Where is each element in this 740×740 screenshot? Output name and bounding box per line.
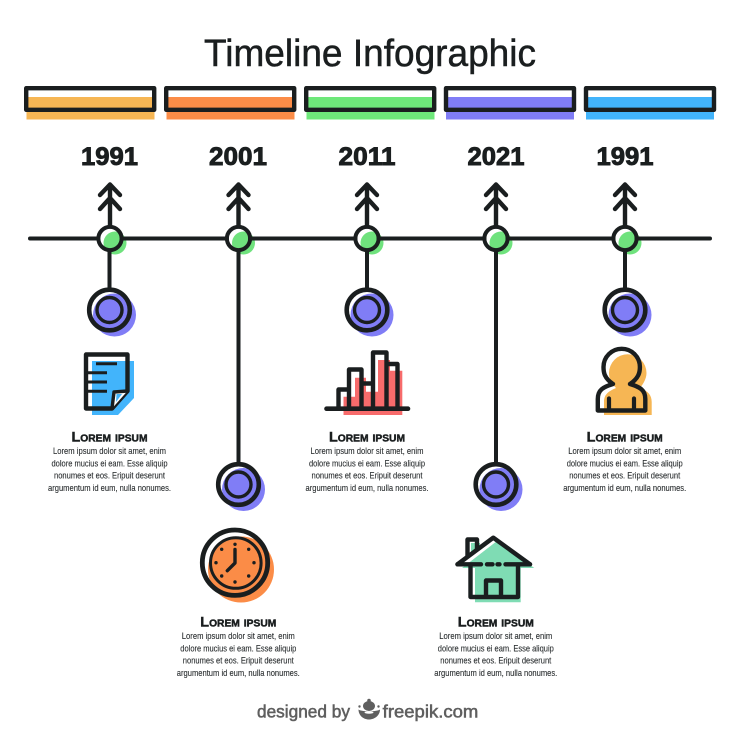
marker: column 3 [347,290,394,336]
arrow: 2001 [228,184,248,225]
heading: Lorem ipsum [458,614,534,630]
heading: Lorem ipsum [587,429,663,445]
timeline axis [30,236,710,240]
year 2011: 2011 [338,143,396,171]
arrow: 2011 [357,184,377,225]
credit text left: designed by [257,701,350,721]
connectors [110,251,625,462]
bar: blue [586,88,714,120]
body copy [563,446,686,493]
body copy: argumentum id eum, nulla nonumes. [177,668,300,678]
icon: clock [202,530,274,602]
arrow: 1991 [100,184,120,225]
body copy: nonumes et eos. Eripuit deserunt [569,471,681,481]
text block: column 1 [48,429,171,493]
year labels [81,143,654,171]
body copy: argumentum id eum, nulla nonumes. [48,483,171,493]
body copy: argumentum id eum, nulla nonumes. [563,483,686,493]
body copy [434,631,557,678]
timeline node rings [98,227,637,250]
body copy: nonumes et eos. Eripuit deserunt [440,656,552,666]
icon: house [458,538,534,602]
body copy [306,446,428,493]
body copy [48,446,171,493]
credit text right: freepik.com [383,701,478,721]
body copy: Lorem ipsum dolor sit amet, enim [53,446,166,456]
body copy: dolore mucius ei eam. Esse aliquip [180,643,296,653]
arrow: 2021 [486,184,506,225]
body copy: Lorem ipsum dolor sit amet, enim [310,446,424,456]
bar: purple [446,88,574,120]
text block: column 4 [434,614,557,678]
body copy: Lorem ipsum dolor sit amet, enim [439,631,552,641]
body copy: nonumes et eos. Eripuit deserunt [54,471,165,481]
body copy: dolore mucius ei eam. Esse aliquip [309,458,425,468]
heading: Lorem ipsum [329,429,405,445]
marker: column 2 [218,464,265,511]
body copy: nonumes et eos. Eripuit deserunt [183,656,294,666]
heading: Lorem ipsum [200,614,276,630]
arrow: 1991 second [615,184,635,225]
bar: yellow [26,88,155,120]
footer credit [257,699,478,721]
icon: document [86,354,134,415]
icon: bar chart [326,352,408,415]
heading: Lorem ipsum [72,429,148,445]
year 2021: 2021 [468,143,525,171]
timeline nodes shadows [104,232,642,254]
title: Timeline Infographic [204,33,536,75]
bar: green [306,88,434,120]
body copy: Lorem ipsum dolor sit amet, enim [568,446,681,456]
body copy: argumentum id eum, nulla nonumes. [434,668,557,678]
marker: column 5 [605,290,652,336]
year 1991 second: 1991 [596,143,654,171]
text block: column 2 [177,614,300,678]
text block: column 5 [563,429,686,493]
body copy: Lorem ipsum dolor sit amet, enim [182,631,295,641]
text block: column 3 [306,429,428,493]
body copy: argumentum id eum, nulla nonumes. [306,483,428,493]
colour bars row [26,88,714,120]
body copy: dolore mucius ei eam. Esse aliquip [567,458,683,468]
year 2001: 2001 [209,143,267,171]
marker: column 1 [89,290,136,336]
body copy: dolore mucius ei eam. Esse aliquip [52,458,168,468]
body copy: dolore mucius ei eam. Esse aliquip [438,643,554,653]
marker: column 4 [476,464,522,511]
icon: freepik logo [358,699,380,720]
icon: person [598,349,652,415]
year 1991: 1991 [81,143,138,171]
body copy: nonumes et eos. Eripuit deserunt [312,471,423,481]
body copy [177,631,300,678]
bar: orange [166,88,294,120]
